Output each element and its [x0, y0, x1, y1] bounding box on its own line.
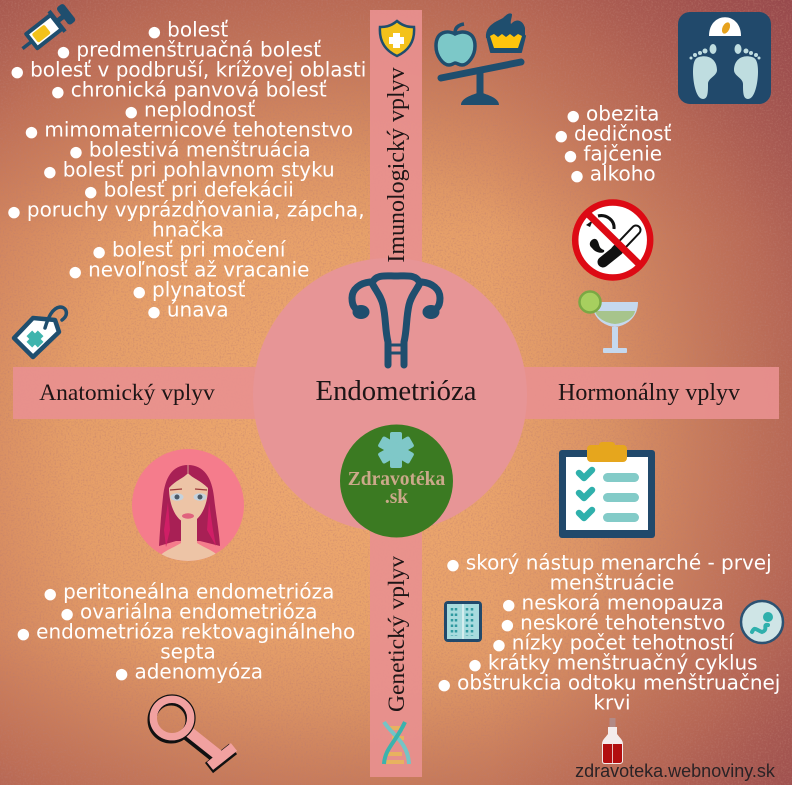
icon: no smoking: [575, 202, 650, 278]
text block: risk factors: ● alkoho: [570, 162, 656, 186]
panel: horizontal band: [13, 367, 779, 419]
text block: symptoms: ● bolesť pri defekácii: [84, 178, 294, 202]
icon: uterus: [352, 276, 440, 365]
text block: risk factors: ● dedičnosť: [555, 122, 672, 146]
panel: vertical band: [370, 10, 422, 777]
logo: Zdravotéka.sk: [340, 424, 453, 538]
heading: Genetický vplyv: Genetický vplyv: [384, 556, 410, 712]
text block: types of endometriosis: ● adenomyóza: [115, 660, 263, 684]
icon: woman portrait: [132, 449, 244, 562]
text block: menstrual factors: ● skorý nástup menarché - prvej: [446, 551, 772, 575]
text block: symptoms: ● bolesť pri pohlavnom styku: [43, 158, 335, 182]
icon: cocktail: [580, 292, 638, 353]
logo: Zdravotéka.sk: Zdravotéka: [348, 469, 446, 490]
heading: Hormonálny vplyv: Hormonálny vplyv: [558, 380, 740, 406]
text block: symptoms: ● poruchy vyprázdňovania, zápcha,: [7, 198, 365, 222]
text block: symptoms: ● bolesť: [148, 18, 228, 42]
text block: symptoms: hnačka: [152, 218, 224, 242]
icon: tag: [14, 307, 66, 357]
text block: symptoms: ● bolesť v podbruší, krížovej oblasti: [11, 58, 366, 82]
icon: scale with feet: [678, 12, 771, 104]
icon: apple and cupcake on balance: [436, 13, 525, 105]
logo: Zdravotéka.sk: .sk: [385, 487, 408, 508]
text block: symptoms: ● neplodnosť: [125, 98, 256, 122]
text block: types of endometriosis: ● ovariálna endometrióza: [61, 600, 317, 624]
text block: menstrual factors: ● neskorá menopauza: [502, 591, 724, 615]
title: Endometrióza: [316, 375, 477, 407]
icon: female symbol key: [149, 695, 234, 768]
panel: central circle: [253, 258, 527, 532]
text block: menstrual factors: ● obštrukcia odtoku menštruačnej: [438, 671, 780, 695]
text block: symptoms: ● predmenštruačná bolesť: [57, 38, 321, 62]
icon: pill pack: [444, 601, 482, 642]
icon: DNA: [384, 722, 409, 764]
text block: menstrual factors: menštruácie: [550, 571, 674, 595]
text block: menstrual factors: krvi: [593, 691, 631, 715]
text block: menstrual factors: ● nízky počet tehotností: [492, 631, 735, 655]
text block: types of endometriosis: ● peritoneálna endometrióza: [44, 580, 334, 604]
icon: clipboard: [559, 442, 655, 538]
text block: symptoms: ● bolesť pri močení: [93, 238, 287, 262]
icon: baby in circle: [741, 601, 783, 643]
heading: Anatomický vplyv: Anatomický vplyv: [39, 380, 215, 406]
text block: menstrual factors: ● krátky menštruačný cyklus: [468, 651, 758, 675]
source url: zdravoteka.webnoviny.sk: [575, 761, 776, 781]
icon: wine bottle: [602, 718, 623, 764]
text block: symptoms: ● bolestivá menštruácia: [69, 138, 311, 162]
text block: symptoms: ● nevoľnosť až vracanie: [69, 258, 309, 282]
text block: risk factors: [555, 102, 672, 186]
text block: types of endometriosis: septa: [160, 640, 216, 664]
text block: symptoms: ● chronická panvová bolesť: [51, 78, 327, 102]
text block: symptoms: ● mimomaternicové tehotenstvo: [25, 118, 353, 142]
text block: symptoms: ● plynatosť: [133, 278, 246, 302]
text block: menstrual factors: ● neskoré tehotenstvo: [501, 611, 725, 635]
text block: risk factors: ● obezita: [567, 102, 659, 126]
text block: symptoms: [7, 18, 366, 322]
text block: symptoms: ● únava: [147, 298, 229, 322]
text block: types of endometriosis: ● endometrióza rektovaginálneho: [17, 620, 355, 644]
text block: risk factors: ● fajčenie: [564, 142, 662, 166]
text block: types of endometriosis: [17, 580, 355, 684]
icon: syringe: [14, 1, 78, 59]
icon: shield: [380, 21, 414, 56]
heading: Imunologický vplyv: Imunologický vplyv: [384, 67, 410, 263]
text block: menstrual factors: [438, 551, 780, 715]
